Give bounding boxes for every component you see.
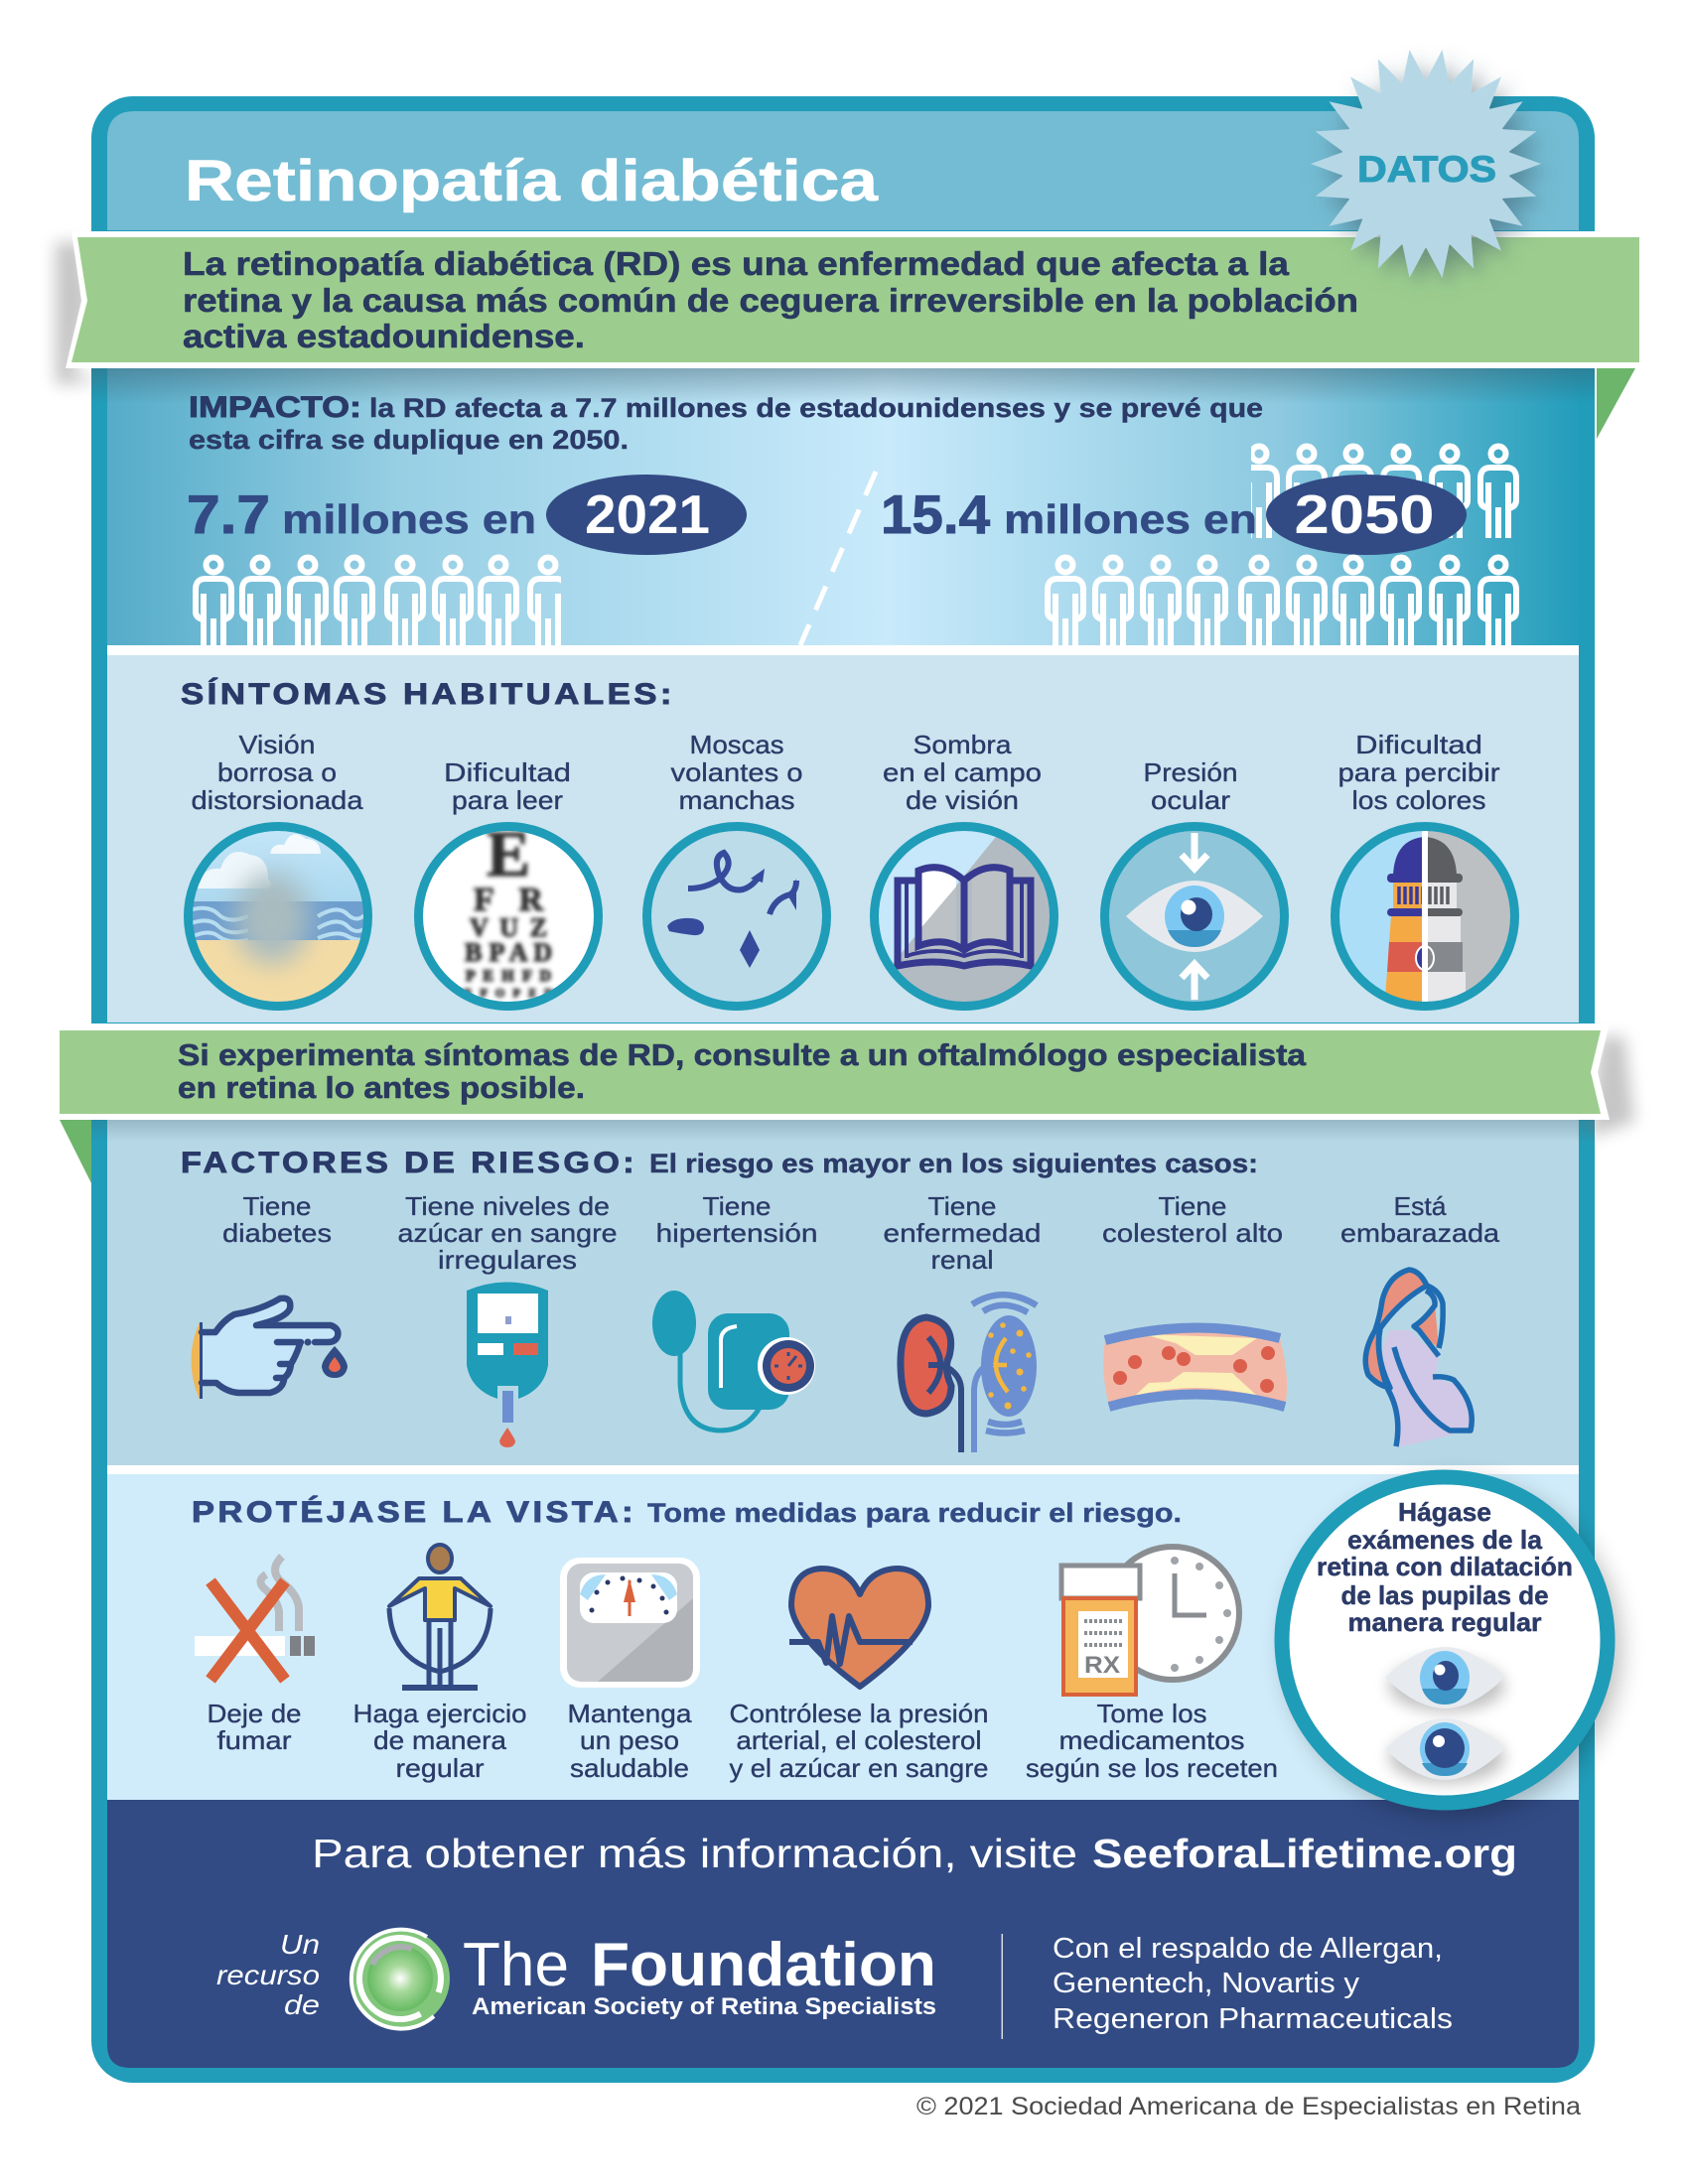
- logo: The Foundation: Foundation: [591, 1931, 936, 1999]
- protect labels: según se los receten: [1026, 1753, 1278, 1783]
- icon: glucose meter: [467, 1283, 548, 1447]
- banner shadow: [56, 242, 99, 385]
- sponsors text: Genentech, Novartis y: [1053, 1968, 1360, 1999]
- risk labels: Tiene niveles de: [405, 1191, 610, 1221]
- callout text: manera regular: [1348, 1607, 1541, 1637]
- icon: blurred eye chart: E F O P Z D: [464, 986, 553, 1000]
- icon: weight scale: [560, 1558, 700, 1688]
- impact heading text: esta cifra se duplique en 2050.: [189, 425, 629, 455]
- protect labels: Mantenga: [568, 1699, 692, 1728]
- callout text: retina con dilatación: [1317, 1552, 1573, 1581]
- protect labels: Tome los: [1096, 1699, 1207, 1728]
- symptom labels: de visión: [906, 785, 1019, 815]
- risk labels: renal: [931, 1245, 993, 1275]
- symptom labels: Dificultad: [1355, 730, 1482, 759]
- icon: finger prick: [191, 1298, 348, 1400]
- callout text: exámenes de la: [1347, 1525, 1543, 1555]
- icon: blood pressure cuff: [652, 1291, 815, 1431]
- dashed divider: [800, 472, 876, 645]
- sponsors text: [1053, 1933, 1453, 2035]
- protect heading: [192, 1495, 1182, 1529]
- resource label: de: [284, 1989, 320, 2020]
- sponsors text: Regeneron Pharmaceuticals: [1053, 2003, 1453, 2035]
- banner: see a specialist: [60, 1024, 1610, 1120]
- resource label: [216, 1929, 320, 2020]
- symptom labels: Presión: [1144, 757, 1237, 787]
- stat: 15.4 millones en 2050: 2050: [1295, 483, 1434, 545]
- symptom labels: distorsionada: [191, 785, 363, 815]
- impact heading text: IMPACTO:: [189, 391, 361, 424]
- callout: retina exam circle: [1282, 1477, 1619, 1815]
- risk heading: El riesgo es mayor en los siguientes casos:: [649, 1149, 1258, 1178]
- panel: protect your vision: [107, 1474, 1579, 1800]
- icon: lighthouse colour split: [1335, 826, 1515, 1008]
- banner shadow: [1589, 1036, 1634, 1138]
- symptom labels: los colores: [1352, 785, 1485, 815]
- protect labels: Contrólese la presión: [729, 1699, 989, 1728]
- risk heading: FACTORES DE RIESGO:: [181, 1147, 637, 1179]
- protect labels: y el azúcar en sangre: [729, 1753, 989, 1783]
- panel: risk factors: [91, 1120, 1595, 1465]
- symptom labels: para percibir: [1338, 757, 1500, 787]
- website line: SeeforaLifetime.org: [1092, 1831, 1517, 1876]
- icon: book with shadow: [874, 826, 1055, 1007]
- stat: 15.4 millones en 2050: [881, 475, 1467, 555]
- icon: jump rope: [389, 1545, 491, 1691]
- callout text: de las pupilas de: [1340, 1580, 1549, 1610]
- risk labels: Tiene: [927, 1191, 997, 1221]
- symptom labels: Visión: [238, 730, 316, 759]
- risk labels: diabetes: [222, 1218, 332, 1248]
- protect heading: PROTÉJASE LA VISTA:: [192, 1495, 636, 1529]
- protect labels: medicamentos: [1058, 1725, 1245, 1755]
- badge: DATOS starburst: [1311, 48, 1541, 280]
- arrow fold: second banner: [60, 1120, 91, 1183]
- symptom labels: borrosa o: [217, 757, 337, 787]
- logo: The Foundation: American Society of Retina Specialists: [472, 1993, 936, 2020]
- protect heading: Tome medidas para reducir el riesgo.: [647, 1498, 1182, 1528]
- banner text: activa estadounidense.: [183, 318, 585, 354]
- icon: pregnant woman: [1365, 1270, 1472, 1447]
- risk labels: embarazada: [1340, 1218, 1500, 1248]
- icon: eye lower: [1385, 1718, 1504, 1783]
- icon: blurred eye chart: F R: [474, 882, 543, 918]
- risk labels: Está: [1394, 1191, 1447, 1221]
- arrow fold: top banner: [1597, 368, 1635, 439]
- icon: blurred eye chart: P E H F D: [466, 968, 551, 985]
- stat: 7.7 millones en 2021: 2021: [585, 483, 710, 545]
- risk labels: enfermedad: [884, 1218, 1041, 1248]
- banner text: [178, 1037, 1307, 1105]
- symptom labels: Sombra: [914, 730, 1012, 759]
- panel: impact: [91, 368, 1595, 649]
- risk labels: azúcar en sangre: [397, 1218, 618, 1248]
- risk labels: hipertensión: [655, 1218, 818, 1248]
- protect labels: [207, 1699, 1278, 1783]
- protect labels: regular: [395, 1753, 485, 1783]
- icon: floaters: [647, 826, 826, 1007]
- banner text: retina y la causa más común de ceguera irreversible en la población: [183, 282, 1358, 319]
- symptoms heading: SÍNTOMAS HABITUALES:: [181, 677, 675, 711]
- stat: 15.4 millones en 2050: millones en: [1004, 496, 1257, 542]
- symptom labels: Dificultad: [444, 757, 571, 787]
- protect labels: un peso: [580, 1725, 679, 1755]
- sponsors text: Con el respaldo de Allergan,: [1053, 1933, 1443, 1965]
- resource label: recurso: [216, 1960, 320, 1990]
- symptom labels: [191, 730, 1500, 815]
- banner: definition: [66, 231, 1639, 368]
- resource label: Un: [280, 1929, 320, 1960]
- protect labels: fumar: [216, 1725, 292, 1755]
- panel: symptoms: [107, 655, 1579, 1023]
- impact heading text: [189, 391, 1263, 455]
- symptom labels: Moscas: [689, 730, 784, 759]
- stat: 15.4 millones en 2050: 15.4: [881, 483, 990, 545]
- badge: DATOS starburst: DATOS: [1357, 149, 1496, 190]
- people: 2021 row: [196, 558, 566, 649]
- icon: no smoking: [195, 1557, 315, 1680]
- risk labels: Tiene: [1158, 1191, 1227, 1221]
- protect labels: Haga ejercicio: [353, 1699, 526, 1728]
- symptom labels: volantes o: [671, 757, 802, 787]
- panel: footer: [107, 1800, 1579, 2068]
- icon: artery with plaque: [1103, 1327, 1287, 1407]
- stat: 7.7 millones en 2021: 7.7: [187, 483, 270, 545]
- icon: blurred beach: [189, 826, 367, 1008]
- icon: eye pressure: [1104, 826, 1285, 1007]
- website line: [312, 1831, 1517, 1876]
- impact heading text: la RD afecta a 7.7 millones de estadounidenses y se prevé que: [369, 393, 1263, 423]
- stat: 7.7 millones en 2021: [187, 475, 747, 555]
- risk heading: [181, 1147, 1258, 1179]
- icon: prescription bottle and clock: RX: [1084, 1652, 1120, 1679]
- icon: prescription bottle and clock: [1061, 1547, 1239, 1695]
- symptom labels: para leer: [452, 785, 563, 815]
- banner text: Si experimenta síntomas de RD, consulte a un oftalmólogo especialista: [178, 1037, 1307, 1072]
- stat: 7.7 millones en 2021: millones en: [282, 496, 536, 542]
- symptom labels: en el campo: [883, 757, 1042, 787]
- risk labels: irregulares: [438, 1245, 577, 1275]
- protect labels: arterial, el colesterol: [737, 1725, 981, 1755]
- icon: blurred eye chart: B P A D: [465, 938, 552, 967]
- people: 2050 top row: [1241, 447, 1516, 538]
- logo: The Foundation: The: [463, 1931, 569, 1999]
- panel: header background: [107, 111, 1579, 230]
- icon: kidneys: [901, 1295, 1037, 1452]
- icon: blurred eye chart: E: [487, 818, 530, 890]
- copyright: © 2021 Sociedad Americana de Especialistas en Retina: [916, 2093, 1581, 2120]
- protect labels: saludable: [570, 1753, 689, 1783]
- callout text: [1317, 1497, 1573, 1637]
- banner text: [183, 245, 1358, 354]
- banner text: en retina lo antes posible.: [178, 1070, 585, 1105]
- icon: heart with pulse: [789, 1569, 928, 1687]
- icon: blurred eye chart: V U Z: [470, 913, 547, 942]
- icon: eye upper: [1385, 1647, 1504, 1711]
- risk labels: [222, 1191, 1500, 1275]
- symptom labels: ocular: [1151, 785, 1230, 815]
- protect labels: de manera: [373, 1725, 507, 1755]
- people: 2050 bottom row: [1048, 558, 1516, 649]
- protect labels: Deje de: [207, 1699, 302, 1728]
- symptom labels: manchas: [679, 785, 794, 815]
- website line: Para obtener más información, visite: [312, 1831, 1077, 1876]
- risk labels: Tiene: [242, 1191, 312, 1221]
- title: Retinopatía diabética: [185, 149, 879, 213]
- risk labels: Tiene: [703, 1191, 771, 1221]
- icon: blurred eye chart: [419, 818, 598, 1007]
- risk labels: colesterol alto: [1102, 1218, 1283, 1248]
- callout text: Hágase: [1398, 1497, 1491, 1527]
- logo: The Foundation: [351, 1929, 936, 2029]
- banner text: La retinopatía diabética (RD) es una enfermedad que afecta a la: [183, 245, 1290, 282]
